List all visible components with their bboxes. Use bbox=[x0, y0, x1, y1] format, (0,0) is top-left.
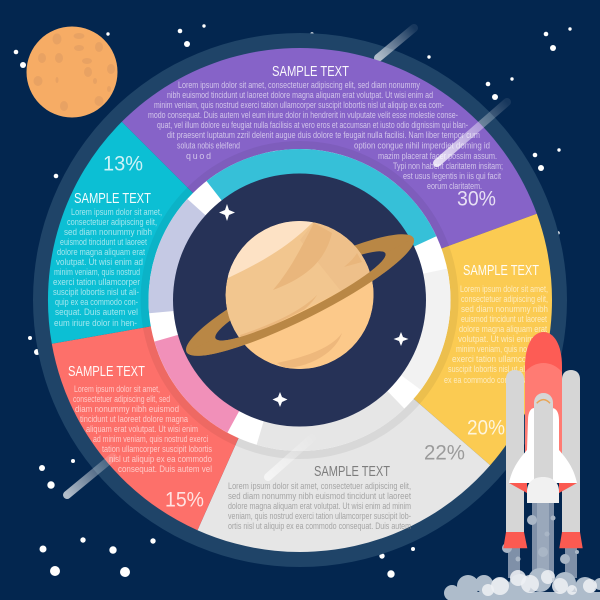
body text: yellow: consectetuer adipiscing elit, bbox=[461, 294, 548, 304]
saturn ring: back bbox=[176, 217, 424, 373]
shuttle spine bbox=[534, 393, 553, 480]
moon bbox=[26, 26, 118, 118]
body text: yellow bbox=[444, 284, 548, 385]
body text: gray: Lorem ipsum dolor sit amet, consectetuer adipiscing elit, bbox=[228, 481, 411, 491]
body text: purple: quat, vel illum dolore eu feugiat nulla facilisis at vero eros et accumsan et iusto odio dignissim qui blan- bbox=[157, 120, 468, 130]
body text: cyan: sed diam nonummy nibh bbox=[64, 227, 152, 237]
inner shadow band bbox=[140, 141, 458, 459]
body text: gray: dolore magna aliquam erat volutpat. Ut wisi enim ad minim bbox=[228, 501, 411, 511]
body text: red bbox=[73, 384, 212, 474]
wedge: cyan 13% bbox=[48, 122, 300, 344]
rocket exhaust columns bbox=[502, 503, 579, 578]
body text: cyan: euismod tincidunt ut laoreet bbox=[60, 237, 147, 247]
body text: cyan: consectetuer adipiscing elit, bbox=[67, 217, 157, 227]
body text: cyan: dolore magna aliquam erat bbox=[57, 247, 145, 257]
body text: red: consectetuer adipiscing elit, sed bbox=[73, 394, 170, 404]
body text: cyan: volutpat. Ut wisi enim ad bbox=[56, 257, 143, 267]
ring segment: teal bbox=[214, 162, 425, 242]
body text: purple: Typi non habent claritatem insitam; bbox=[393, 161, 503, 171]
rocket bbox=[503, 332, 583, 548]
comet: over gray wedge bbox=[268, 438, 312, 477]
body text: cyan: Lorem ipsum dolor sit amet, bbox=[71, 207, 162, 217]
ring segment: off-white bbox=[411, 271, 438, 382]
saturn ring: front bbox=[186, 238, 424, 373]
body text: red: diam nonummy nibh euismod bbox=[75, 404, 179, 414]
wedge: purple 30% bbox=[122, 48, 537, 300]
panel text: cyan bbox=[53, 152, 162, 328]
body text: red: nisl ut aliquip ex ea commodo bbox=[109, 454, 212, 464]
body text: gray bbox=[228, 481, 411, 531]
body text: purple: Lorem ipsum dolor sit amet, consectetuer adipiscing elit, sed diam nonummy bbox=[178, 80, 420, 90]
wedge: red 15% bbox=[52, 300, 300, 530]
body text: cyan: quip ex ea commodo con- bbox=[55, 297, 138, 307]
smoke cloud bbox=[444, 568, 600, 600]
body text: gray: veniam, quis nostrud exerci tation ullamcorper suscipit lob- bbox=[228, 511, 411, 521]
outer ring of the chart bbox=[33, 33, 567, 567]
percent: 15%: 15% bbox=[165, 488, 204, 512]
shuttle wing tips bbox=[509, 483, 577, 493]
panel text: purple bbox=[148, 64, 503, 210]
left booster bbox=[506, 370, 524, 532]
body text: purple: nibh euismod tincidunt ut laoreet dolore magna aliquam erat volutpat. Ut wisi enim ad bbox=[167, 90, 433, 100]
body text: purple: modo consequat. Duis autem vel eum iriure dolor in hendrerit in vulputate velit esse molestie conse- bbox=[148, 110, 458, 120]
body text: purple: est usus legentis in iis qui facit bbox=[403, 171, 501, 181]
body text: red: tincidunt ut laoreet dolore magna bbox=[80, 414, 188, 424]
body text: cyan: minim veniam, quis nostrud bbox=[54, 267, 140, 277]
body text: yellow: dolore magna aliquam erat bbox=[459, 324, 547, 334]
inner segmented ring bbox=[161, 162, 438, 438]
body text: purple: dit praesent luptatum zzril delenit augue duis dolore te feugait nulla facilisi. Nam liber tempor cum bbox=[167, 130, 480, 140]
heading: purple: SAMPLE TEXT bbox=[272, 64, 349, 80]
body text: yellow: minim veniam, quis nostrud bbox=[456, 344, 543, 354]
body text: red: ad minim veniam, quis nostrud exerci bbox=[93, 434, 208, 444]
nozzles bbox=[503, 532, 583, 548]
body text: purple: option congue nihil imperdiet doming id bbox=[354, 140, 490, 150]
panel text: red bbox=[68, 364, 212, 512]
comet: bottom left bbox=[67, 457, 113, 495]
body text: yellow: suscipit lobortis nisl ut aliquip bbox=[448, 364, 540, 374]
body text: cyan bbox=[53, 207, 162, 328]
donut chart wedges bbox=[48, 48, 552, 552]
dark space disc bbox=[173, 174, 426, 426]
saturn body bbox=[226, 221, 374, 369]
body text: gray: sed diam nonummy nibh euismod tincidunt ut laoreet bbox=[228, 491, 411, 501]
body text: cyan: sequat. Duis autem vel bbox=[55, 307, 138, 317]
cockpit arc bbox=[537, 400, 550, 403]
body text: yellow: exerci tation ullamcorper bbox=[452, 354, 541, 364]
body text: red: consequat. Duis autem vel bbox=[118, 464, 212, 474]
body text: red: Lorem ipsum dolor sit amet, bbox=[74, 384, 160, 394]
body text: purple bbox=[148, 80, 503, 191]
heading: red: SAMPLE TEXT bbox=[68, 364, 145, 380]
percent: 13%: 13% bbox=[103, 152, 143, 176]
percent: 30%: 30% bbox=[457, 186, 496, 210]
shuttle body bbox=[509, 408, 577, 483]
ring segment: pink bbox=[166, 338, 233, 422]
body text: purple: minim veniam, quis nostrud exerci tation ullamcorper suscipit lobortis nisl ut aliquip ex ea com- bbox=[154, 100, 444, 110]
body text: gray: ortis nisl ut aliquip ex ea commodo consequat. Duis autem bbox=[228, 521, 411, 531]
body text: yellow: euismod tincidunt ut laoreet bbox=[461, 314, 547, 324]
percent: 22%: 22% bbox=[424, 440, 465, 464]
right booster bbox=[562, 370, 580, 532]
saturn bbox=[186, 221, 414, 369]
comet: top bbox=[378, 28, 414, 58]
wedge: gray 22% bbox=[198, 300, 490, 552]
wedge: yellow 20% bbox=[300, 214, 552, 465]
engine dome bbox=[527, 477, 559, 503]
body text: cyan: eum iriure dolor in hen- bbox=[54, 318, 137, 328]
icon: sparkle stars bbox=[219, 204, 408, 407]
body text: purple: soluta nobis eleifend bbox=[177, 140, 240, 150]
body text: red: tation ullamcorper suscipit lobortis bbox=[102, 444, 212, 454]
heading: cyan: SAMPLE TEXT bbox=[74, 191, 151, 207]
body text: cyan: suscipit lobortis nisl ut ali- bbox=[53, 287, 139, 297]
comet: right bbox=[437, 102, 507, 163]
ring segment: light gray bbox=[260, 400, 396, 438]
body text: yellow: sed diam nonummy nibh bbox=[461, 304, 548, 314]
heading: gray: SAMPLE TEXT bbox=[314, 464, 390, 480]
body text: red: aliquam erat volutpat. Ut wisi enim bbox=[86, 424, 198, 434]
heading: yellow: SAMPLE TEXT bbox=[463, 263, 539, 279]
body text: purple: eorum claritatem. bbox=[427, 181, 482, 191]
percent: 20%: 20% bbox=[467, 416, 505, 440]
ring segment: lavender bbox=[161, 207, 197, 312]
body text: yellow: Lorem ipsum dolor sit amet, bbox=[460, 284, 548, 294]
body text: purple: quod bbox=[186, 151, 211, 161]
body text: yellow: ex ea commodo consequat. bbox=[444, 375, 532, 385]
central tank bbox=[525, 332, 562, 460]
body text: yellow: volutpat. Ut wisi enim ad bbox=[458, 334, 545, 344]
panel text: yellow bbox=[444, 263, 548, 440]
body text: purple: mazim placerat facer possim assum. bbox=[378, 151, 497, 161]
body text: cyan: exerci tation ullamcorper bbox=[53, 277, 140, 287]
panel text: gray bbox=[228, 440, 465, 531]
